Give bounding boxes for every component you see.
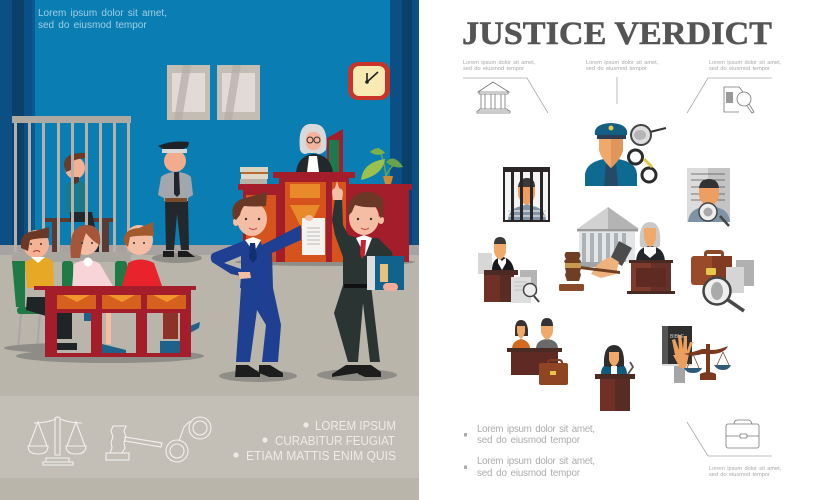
icon: handcuffs [628,150,656,182]
list bottom: Lorem ipsum dolor sit amet, [477,424,595,435]
juror three [122,222,200,333]
folder [367,256,404,290]
note top center: sed do eiusmod tempor [586,66,647,72]
icon: temple outline [477,82,510,113]
icon: bible and hand [662,326,693,383]
icon: prisoner behind bars [503,167,550,222]
prisoner bench [45,218,113,252]
potted plant [361,148,403,184]
head [237,202,267,236]
floor [0,245,419,500]
right curtain [390,0,419,245]
desk side panel [246,195,276,262]
list bottom [464,424,595,479]
shirt and tie [245,237,261,252]
left curtain [0,0,35,245]
icon: briefcase [691,250,732,285]
note top right [709,60,782,72]
icon: mugshot [687,168,730,226]
trousers [236,288,281,362]
connector bottom right [687,422,772,456]
hand with document [305,215,313,221]
prisoner [64,153,100,252]
list bottom: sed do eiusmod tempor [477,435,581,446]
police officer [152,142,202,263]
icon: witness at podium [595,345,635,411]
judge bench [235,124,415,266]
strip list: LOREM IPSUM [315,418,396,433]
icon: judge at bench [627,222,675,294]
icon: gavel and hand [559,241,632,291]
shirt and tie [356,235,372,256]
icon: briefcase outline [726,420,759,448]
icon: courthouse [577,207,639,267]
wall clock [348,62,390,100]
note bottom right [709,466,782,478]
panel: icons and text [419,0,815,500]
note top right: sed do eiusmod tempor [709,66,770,72]
shoes [332,365,381,377]
note top left: Lorem ipsum dolor sit amet, [463,60,536,66]
cage [12,116,131,262]
waist band [344,284,371,288]
floor shadow [235,258,415,266]
icon: papers [726,260,754,293]
juror one [21,227,72,340]
cage bars [14,120,130,252]
note top center: Lorem ipsum dolor sit amet, [586,60,659,66]
hand on hip [238,272,251,279]
lawyer in dark suit [317,181,404,381]
document [302,218,325,255]
wall frame right [217,65,260,120]
icon: handcuffs outline [166,417,211,462]
note bottom right: Lorem ipsum dolor sit amet, [709,466,782,472]
strip list [233,418,396,463]
head [349,201,379,235]
jacket [211,225,301,288]
note top left: sed do eiusmod tempor [463,66,524,72]
panel: courtroom scene [0,0,419,500]
caption top: sed do eiusmod tempor [38,20,147,31]
jury desk [34,286,196,357]
connector left [463,78,548,113]
note top right: Lorem ipsum dolor sit amet, [709,60,782,66]
list bottom: Lorem ipsum dolor sit amet, [477,456,595,467]
shoes [235,365,283,377]
icon: document search outline [724,87,754,113]
jacket and raised arm [332,198,398,285]
judge chair [327,129,343,172]
wall frame left [167,65,210,120]
caption top [38,8,167,31]
central desk [273,172,355,262]
stack of books [240,167,268,184]
strip background [0,396,419,478]
note top left [463,60,536,72]
note top center [586,60,659,72]
raised hand [332,181,343,200]
connector right [687,78,772,113]
strip list: ETIAM MATTIS ENIM QUIS [246,448,396,463]
cage base [12,252,131,262]
icon: small briefcase [539,360,568,385]
cage top [12,116,131,123]
caption top: Lorem ipsum dolor sit amet, [38,8,167,19]
icon: police officer [585,123,637,186]
trousers [334,285,380,362]
back wall [0,0,419,245]
icon: bible and hand: BIBLE [670,334,685,340]
icon: magnifier fingerprint [631,125,666,145]
icon: large magnifier [704,278,744,311]
connector center [616,77,618,104]
strip list: CURABITUR FEUGIAT [275,433,395,448]
icon: scales of justice [684,344,731,380]
icon: documents and magnifier [511,270,539,303]
icon: jury pair [507,318,562,375]
icon: lawyer at podium [478,237,518,302]
judge [296,124,333,172]
icon: scales outline [28,417,86,465]
title: JUSTICE VERDICT [462,16,772,52]
jury chairs [12,261,127,349]
lawyer in blue suit [211,192,325,382]
side desk [238,184,412,262]
juror two [70,225,114,288]
note bottom right: sed do eiusmod tempor [709,472,770,478]
list bottom: sed do eiusmod tempor [477,468,581,479]
icon: gavel outline [106,426,162,460]
panel: icon strip [0,396,419,478]
jury shadow [4,343,204,363]
